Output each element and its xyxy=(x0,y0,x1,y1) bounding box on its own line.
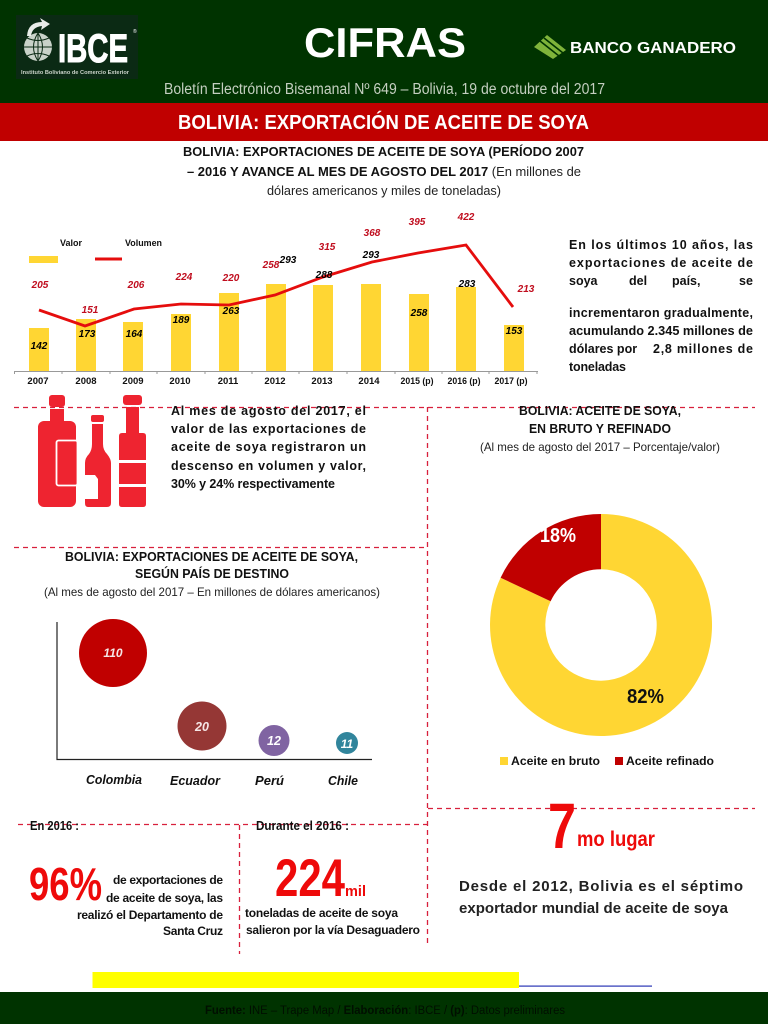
chart heading: dólares americanos y miles de toneladas) xyxy=(267,184,501,198)
stat: 7mo lugar: 7 xyxy=(548,790,576,862)
red title band: BOLIVIA: EXPORTACIÓN DE ACEITE DE SOYA xyxy=(178,110,589,134)
value labels: 189 xyxy=(173,315,190,326)
donut heading: (Al mes de agosto del 2017 – Porcentaje/valor) xyxy=(480,440,720,454)
text block: last 10 years: 2,8 millones de xyxy=(653,342,753,356)
text block: August 2017: aceite de soya registraron un xyxy=(171,440,366,454)
chart heading xyxy=(183,144,584,198)
legend: Valor xyxy=(60,238,82,248)
value labels: 153 xyxy=(506,326,523,337)
country labels: Perú xyxy=(255,773,284,788)
value labels: 288 xyxy=(315,270,333,281)
value labels: 263 xyxy=(222,306,240,317)
icon: bottles xyxy=(38,395,146,507)
value labels: 283 xyxy=(458,279,476,290)
volume labels: 368 xyxy=(364,228,381,239)
text block: August 2017: Al mes de agosto del 2017, el xyxy=(171,404,366,418)
footer band: Fuente: INE – Trape Map / Elaboración: IBCE / (p): Datos preliminares xyxy=(205,1005,565,1017)
title: CIFRAS: CIFRAS xyxy=(304,19,466,66)
value labels: 293 xyxy=(279,255,297,266)
bubble: Ecuador xyxy=(178,702,226,750)
label 82%: 82% xyxy=(627,686,664,708)
country labels: Colombia xyxy=(86,772,142,787)
destination heading: SEGÚN PAÍS DE DESTINO xyxy=(135,566,289,581)
stat: 224 mil xyxy=(245,819,420,937)
year labels xyxy=(27,376,528,387)
logo: IBCE: Instituto Boliviano de Comercio Exterior xyxy=(21,70,129,76)
subtitle: Boletín Electrónico Bisemanal Nº 649 – Bolivia, 19 de octubre del 2017 xyxy=(164,81,605,98)
stat: 224 mil: salieron por la vía Desaguadero xyxy=(246,923,420,937)
value labels: 293 xyxy=(362,250,380,261)
year labels: 2007 xyxy=(27,376,49,387)
volume labels: 151 xyxy=(82,305,99,316)
value labels: 173 xyxy=(79,329,96,340)
stat: 96%: En 2016 : xyxy=(30,819,79,833)
text block: August 2017 xyxy=(171,404,366,491)
year labels: 2009 xyxy=(122,376,144,387)
year labels: 2012 xyxy=(264,376,286,387)
stat: 96%: realizó el Departamento de xyxy=(77,908,223,922)
x axis xyxy=(14,371,538,374)
bubble chart xyxy=(57,619,372,788)
text block: last 10 years: toneladas xyxy=(569,360,626,374)
value bars xyxy=(29,284,524,371)
year labels: 2017 (p) xyxy=(494,376,528,387)
donut legend xyxy=(500,754,714,768)
chart heading: – 2016 Y AVANCE AL MES DE AGOSTO DEL 2017 (En millones de xyxy=(187,165,581,179)
bubble: Chile: 11 xyxy=(341,737,354,751)
logo: Banco Ganadero: BANCO GANADERO xyxy=(570,40,736,57)
volume labels xyxy=(31,212,535,316)
stat: 96%: de aceite de soya, las xyxy=(106,891,223,905)
chart heading: BOLIVIA: EXPORTACIONES DE ACEITE DE SOYA (PERÍODO 2007 xyxy=(183,144,584,159)
volume labels: 220 xyxy=(222,273,240,284)
volume labels: 205 xyxy=(31,280,49,291)
country labels: Ecuador xyxy=(170,773,221,788)
year labels: 2015 (p) xyxy=(400,376,434,387)
bubble: Colombia xyxy=(79,619,147,687)
slice: aceite refinado xyxy=(501,514,601,601)
volume labels: 224 xyxy=(175,272,193,283)
text block: last 10 years: En los últimos 10 años, las xyxy=(569,238,753,252)
text block: last 10 years: incrementaron gradualmente, xyxy=(569,306,753,320)
donut heading xyxy=(480,404,720,454)
destination heading xyxy=(44,550,380,599)
stat: 96%: 96% xyxy=(29,858,102,910)
text block: August 2017: valor de las exportaciones de xyxy=(171,422,366,436)
highlight bar and link underline xyxy=(92,972,652,988)
donut legend: Aceite en bruto xyxy=(511,754,600,768)
bubble: Colombia: 110 xyxy=(103,646,123,660)
logo: IBCE: IBCE xyxy=(58,27,128,71)
donut heading: BOLIVIA: ACEITE DE SOYA, xyxy=(519,404,681,418)
logo: Banco Ganadero xyxy=(534,35,736,59)
logo: IBCE: ® xyxy=(133,28,137,35)
stat: 96%: Santa Cruz xyxy=(163,924,223,938)
legend xyxy=(29,238,162,263)
year labels: 2014 xyxy=(358,376,380,387)
destination heading: (Al mes de agosto del 2017 – En millones de dólares americanos) xyxy=(44,585,380,599)
bubble: Perú: 12 xyxy=(267,734,281,748)
volume labels: 213 xyxy=(517,284,535,295)
value labels: 142 xyxy=(31,341,48,352)
donut heading: EN BRUTO Y REFINADO xyxy=(529,422,671,436)
value labels: 258 xyxy=(410,308,428,319)
stat: 7mo lugar xyxy=(548,790,655,862)
text block: last 10 years: dólares por xyxy=(569,342,637,356)
bubble: Chile xyxy=(336,732,358,754)
stat: 224 mil: toneladas de aceite de soya xyxy=(245,906,398,920)
text block: seventh exporter: exportador mundial de aceite de soya xyxy=(459,900,729,917)
text block: last 10 years: exportaciones de aceite de xyxy=(569,256,753,270)
stat: 224 mil: Durante el 2016 : xyxy=(256,819,349,833)
right bottle xyxy=(119,395,146,507)
text block: August 2017: descenso en volumen y valor, xyxy=(171,459,366,473)
logo: IBCE xyxy=(16,15,138,79)
text block: last 10 years: país, xyxy=(672,274,700,288)
text block: last 10 years: acumulando 2.345 millones de xyxy=(569,324,753,338)
volume labels: 315 xyxy=(319,242,336,253)
big bottle xyxy=(38,395,78,507)
country labels xyxy=(86,772,358,788)
bubble: Perú xyxy=(258,725,290,756)
donut chart xyxy=(490,514,712,736)
year labels: 2011 xyxy=(218,376,239,387)
label 18%: 18% xyxy=(540,525,576,547)
text block: seventh exporter: Desde el 2012, Bolivia es el séptimo xyxy=(459,878,743,895)
text block: last 10 years: del xyxy=(629,274,647,288)
text block: August 2017: 30% y 24% respectivamente xyxy=(171,477,335,491)
text block: last 10 years: soya xyxy=(569,274,599,288)
volume labels: 395 xyxy=(409,217,426,228)
combo chart: value and volume xyxy=(14,212,538,387)
red title band xyxy=(0,103,768,141)
volume labels: 422 xyxy=(457,212,475,223)
text block: last 10 years xyxy=(569,238,753,374)
legend: Volumen xyxy=(125,238,162,248)
stat: 7mo lugar: mo lugar xyxy=(577,828,655,851)
bubble: Ecuador: 20 xyxy=(194,720,209,734)
year labels: 2010 xyxy=(169,376,191,387)
donut legend: Aceite refinado xyxy=(626,754,714,768)
text block: seventh exporter xyxy=(459,878,743,917)
destination heading: BOLIVIA: EXPORTACIONES DE ACEITE DE SOYA, xyxy=(65,550,358,564)
volume labels: 206 xyxy=(127,280,145,291)
stat: 224 mil: mil xyxy=(345,883,366,900)
stat: 224 mil: 224 xyxy=(275,849,345,908)
year labels: 2016 (p) xyxy=(448,376,480,387)
value labels: 164 xyxy=(126,329,143,340)
middle bottle xyxy=(85,415,111,507)
country labels: Chile xyxy=(328,773,358,788)
stat: 96% xyxy=(29,819,223,938)
volume labels: 258 xyxy=(262,260,280,271)
footer band xyxy=(0,992,768,1024)
volume line xyxy=(39,245,513,326)
header band xyxy=(0,0,768,103)
value labels xyxy=(31,250,523,352)
stat: 96%: de exportaciones de xyxy=(113,873,223,887)
text block: last 10 years: se xyxy=(739,274,753,288)
year labels: 2013 xyxy=(311,376,333,387)
year labels: 2008 xyxy=(75,376,97,387)
slice: aceite en bruto xyxy=(490,514,712,736)
